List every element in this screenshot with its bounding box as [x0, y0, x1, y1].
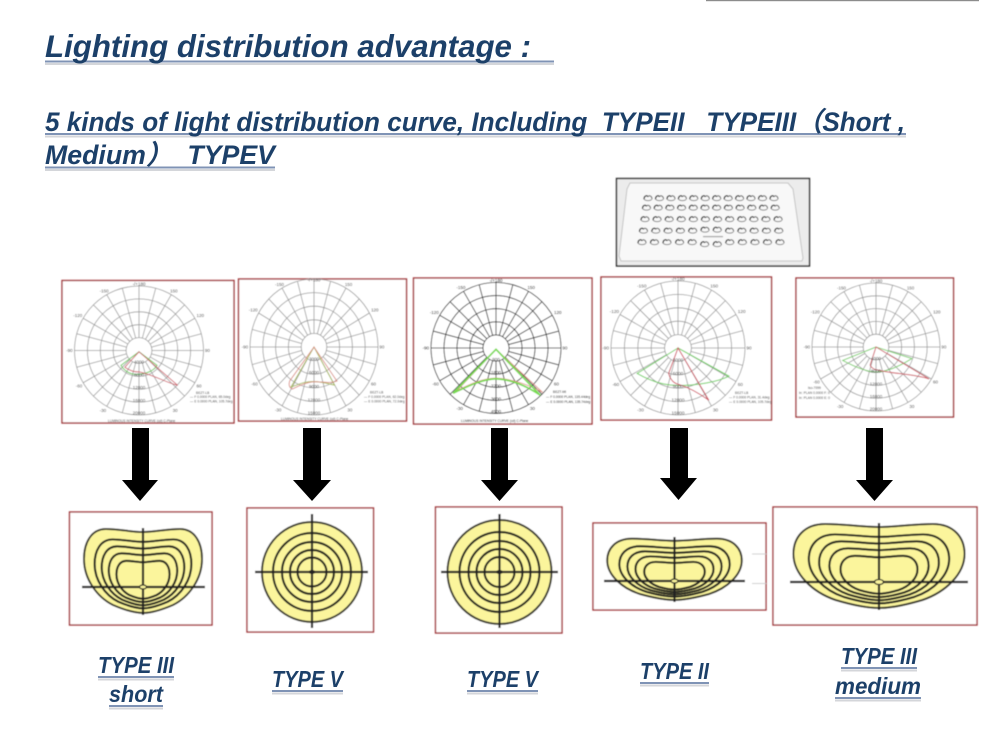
pattern 2: type V [247, 508, 374, 632]
polar chart 2: type V: — F 0.0000 PLAN, 62.0deg [364, 395, 405, 399]
polar chart 5: type III medium: In: PLAN 0.0000 F: 0 [799, 391, 830, 395]
polar chart 5: type III medium: 120 [933, 310, 941, 315]
polar chart 3: type V: -30 [456, 406, 463, 411]
polar chart 2: type V: 9000 [309, 384, 319, 389]
polar chart 1: type III short: 16000 [133, 398, 146, 403]
polar chart 1: type III short: 4000 [134, 359, 145, 364]
polar chart 5: type III medium: 4000 [871, 356, 881, 361]
polar chart 2: type V: 120 [371, 308, 379, 313]
polar chart 3: type V: -90 [423, 345, 430, 350]
polar chart 5: type III medium: 150 [907, 285, 915, 290]
polar chart 2: type V: -30 [275, 407, 282, 413]
label: TYPE III medium: medium [835, 673, 921, 699]
polar chart 5: type III medium: -/+180 [870, 278, 883, 283]
polar chart 1: type III short: 60 [196, 383, 202, 388]
polar chart 1: type III short: -90 [66, 348, 73, 353]
polar chart 4: type II [601, 276, 772, 420]
polar chart 2: type V: -120 [249, 308, 258, 313]
polar chart 2: type V: — E 0.0000 PLAN, 72.0deg [364, 400, 405, 404]
polar chart 4: type II: — F 0.0000 PLAN, 31.4deg [729, 396, 770, 400]
polar chart 2: type V: 90 [379, 344, 385, 349]
polar chart 2: type V: 15000 [308, 410, 321, 415]
polar chart 4: type II: 60 [738, 382, 743, 387]
label: TYPE II: TYPE II [640, 658, 709, 684]
arrow 2 [293, 428, 331, 501]
polar chart 3: type V: BEZT-MI [553, 390, 566, 394]
polar chart 5: type III medium: 8000 [871, 369, 881, 374]
pattern 4: type II [593, 523, 766, 610]
polar chart 3: type V: 1800 [491, 370, 502, 375]
polar chart 1: type III short: -150 [100, 288, 109, 293]
polar chart 4: type II: 15000 [671, 410, 685, 415]
polar chart 3: type V: 3600 [491, 396, 502, 401]
polar chart 5: type III medium: Iso-7099 [808, 386, 821, 390]
arrow 5 [856, 428, 893, 501]
polar chart 1: type III short: 90 [205, 348, 210, 353]
polar chart 3: type V: — F 0.0000 PLAN, 135.44deg [546, 395, 590, 399]
polar chart 3: type V: — E 0.0000 PLAN, 135.74deg [546, 400, 591, 404]
label: TYPE V: TYPE V [272, 666, 345, 692]
polar chart 4: type II: 120 [738, 309, 746, 314]
label: TYPE III short [98, 652, 174, 708]
polar chart 2: type V [238, 278, 406, 421]
polar chart 5: type III medium [796, 278, 954, 417]
polar chart 3: type V [414, 278, 592, 424]
polar chart 5: type III medium: -120 [811, 310, 820, 315]
pattern 3: type V [436, 507, 562, 633]
polar chart 1: type III short: — F 0.0000 PLAN, 65.0deg [190, 395, 231, 399]
polar chart 2: type V: BEZT-LB [370, 390, 384, 394]
label: TYPE III medium: TYPE III [841, 643, 917, 669]
polar chart 1: type III short: 30 [173, 408, 178, 413]
polar chart 1: type III short: -60 [76, 383, 83, 388]
polar chart 4: type II: -120 [610, 309, 619, 314]
polar chart 3: type V: 90 [562, 345, 568, 350]
polar chart 1: type III short: 120 [197, 313, 205, 318]
label: TYPE III short: TYPE III [98, 652, 174, 678]
polar chart 3: type V: -/+180 [490, 278, 503, 283]
polar chart 3: type V: LUMINOUS INTENSITY CURVE (cd) C-Plane [461, 419, 528, 423]
polar chart 5: type III medium: 20000 [870, 406, 883, 411]
polar chart 4: type II: BEZT-LB [735, 391, 749, 395]
polar chart 1: type III short: 150 [170, 288, 178, 293]
polar chart 5: type III medium: -60 [813, 379, 820, 384]
polar chart 5: type III medium: 12000 [870, 381, 883, 386]
polar chart 4: type II: 6000 [673, 371, 684, 376]
arrow 3 [481, 428, 518, 501]
subtitle: 5 kinds of light distribution curve, Including TYPEII TYPEIII（Short , [45, 107, 905, 137]
polar chart 1: type III short [62, 280, 234, 423]
polar chart 5: type III medium: -90 [804, 344, 811, 349]
polar chart 5: type III medium: In: PLAN 0.0000 E: 0 [799, 396, 830, 400]
polar chart 4: type II: 30 [713, 408, 719, 413]
polar chart 5: type III medium: -150 [837, 285, 846, 290]
label: TYPE III medium [835, 643, 921, 700]
polar chart 1: type III short: BEZT-LB [196, 391, 210, 395]
arrow 4 [660, 428, 697, 500]
pattern 1: type III short [70, 512, 212, 625]
polar chart 1: type III short: 12000 [133, 385, 146, 390]
polar chart 4: type II: 9000 [673, 384, 684, 389]
polar chart 1: type III short: LUMINOUS INTENSITY CURVE (cd) C-Plane [108, 419, 175, 423]
polar chart 4: type II: -60 [612, 382, 619, 387]
polar chart 3: type V: 4500 [491, 409, 502, 414]
polar chart 3: type V: 2700 [491, 383, 502, 388]
polar chart 4: type II: 12000 [671, 398, 685, 403]
title: Lighting distribution advantage : [45, 28, 531, 64]
polar chart 3: type V: 900 [492, 357, 500, 362]
polar chart 3: type V: -150 [456, 285, 466, 290]
polar chart 3: type V: 60 [554, 381, 559, 386]
subtitle: Medium） TYPEV [45, 140, 277, 170]
polar chart 2: type V: 60 [371, 382, 376, 387]
polar chart 4: type II: 3000 [673, 357, 684, 362]
pattern 5: type III medium [773, 507, 977, 625]
polar chart 2: type V: 6000 [309, 370, 319, 375]
polar chart 1: type III short: — E 0.0000 PLAN, 105.7deg [190, 400, 233, 404]
polar chart 4: type II: -30 [637, 408, 644, 413]
polar chart 1: type III short: -120 [73, 313, 83, 318]
polar chart 3: type V: -120 [430, 310, 439, 315]
polar chart 2: type V: 12000 [308, 397, 321, 402]
subtitle [45, 107, 906, 170]
photo: LED lens module plate [616, 178, 810, 266]
polar chart 5: type III medium: 30 [909, 404, 915, 409]
polar chart 5: type III medium: 90 [941, 344, 947, 349]
polar chart 1: type III short: 8000 [134, 372, 145, 377]
polar chart 2: type V: -150 [275, 282, 284, 287]
polar chart 1: type III short: -/+180 [133, 281, 146, 286]
polar chart 2: type V: LUMINOUS INTENSITY CURVE (cd) C-Plane [281, 417, 348, 421]
polar chart 3: type V: 30 [530, 406, 535, 411]
polar chart 2: type V: -/+180 [308, 278, 321, 283]
polar chart 3: type V: -60 [432, 381, 439, 386]
polar chart 2: type V: -90 [242, 344, 249, 349]
polar chart 1: type III short: -30 [100, 408, 107, 413]
polar chart 4: type II: -90 [602, 345, 609, 350]
polar chart 3: type V: 150 [527, 285, 535, 290]
polar chart 2: type V: -60 [251, 382, 258, 387]
polar chart 2: type V: 30 [347, 407, 353, 413]
label: TYPE III short: short [109, 681, 164, 707]
polar chart 4: type II: 150 [710, 284, 718, 289]
polar chart 4: type II: -/+180 [671, 276, 685, 281]
polar chart 2: type V: 150 [345, 282, 353, 287]
polar chart 1: type III short: 20000 [133, 410, 146, 415]
polar chart 5: type III medium: -30 [837, 404, 844, 409]
polar chart 5: type III medium: 60 [933, 379, 939, 384]
polar chart 4: type II: -150 [637, 284, 647, 289]
polar chart 4: type II: — E 0.0000 PLAN, 105.7deg [729, 400, 772, 404]
label: TYPE V: TYPE V [467, 666, 540, 692]
arrow 1 [122, 428, 158, 501]
polar chart 3: type V: 120 [554, 310, 562, 315]
polar chart 2: type V: 3000 [309, 356, 319, 362]
polar chart 4: type II: 90 [746, 345, 752, 350]
polar chart 5: type III medium: 16000 [870, 394, 883, 399]
top edge line [706, 0, 979, 1]
